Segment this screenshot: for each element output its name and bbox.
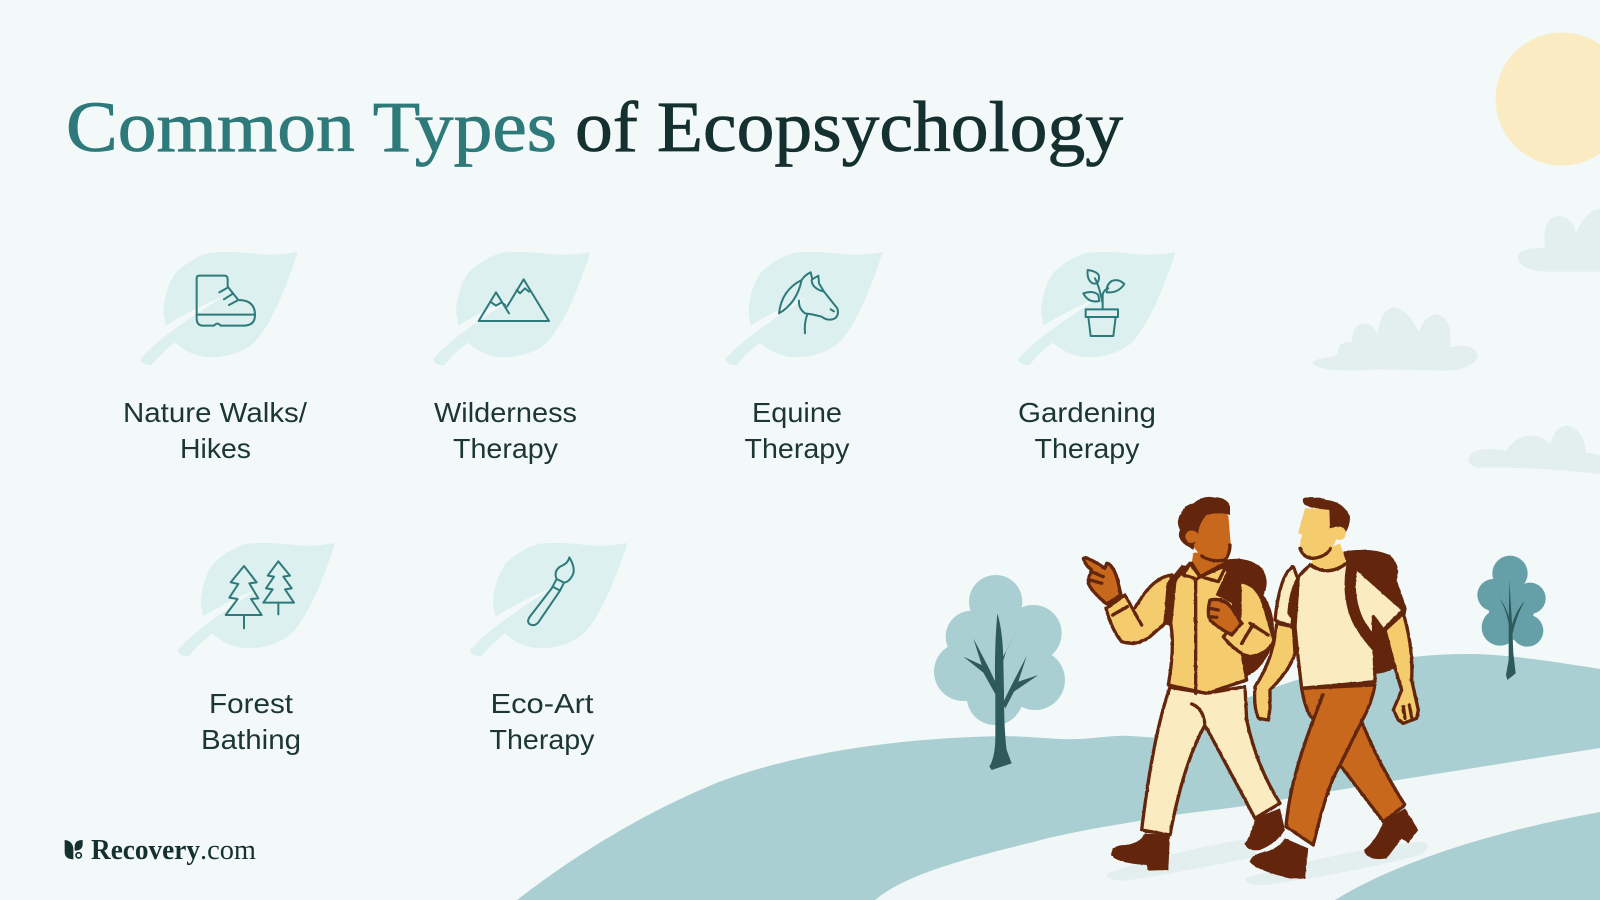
icon: potted plant in leaf	[1018, 252, 1175, 365]
label: Hikes	[180, 433, 251, 464]
label: Wilderness	[434, 397, 577, 428]
card: eco-art therapy	[470, 543, 627, 755]
label: Therapy	[744, 433, 850, 464]
far strap	[1163, 565, 1190, 627]
hand on strap	[1208, 599, 1242, 635]
card: nature walks	[123, 252, 307, 464]
main hill	[517, 654, 1600, 900]
hiker right	[1249, 497, 1418, 879]
icon: logo mark	[65, 840, 83, 859]
icon: trees in leaf	[178, 543, 335, 656]
card: equine therapy	[726, 252, 883, 464]
shirt torso	[1168, 563, 1247, 693]
label	[434, 397, 577, 464]
illustration: two hikers	[1083, 497, 1428, 885]
icon: horse in leaf	[726, 252, 883, 365]
hair	[1303, 497, 1350, 533]
label: Therapy	[453, 433, 558, 464]
title: Common Types	[66, 87, 557, 167]
label: Eco-Art	[490, 688, 594, 719]
far sleeve	[1275, 567, 1298, 627]
logo wordmark	[91, 835, 256, 866]
far arm	[1255, 623, 1295, 720]
ground shadows	[1107, 838, 1428, 885]
label	[123, 397, 307, 464]
trousers	[1142, 687, 1280, 835]
face	[1298, 508, 1337, 558]
near strap	[1350, 567, 1380, 650]
clouds	[1313, 208, 1600, 474]
label: Bathing	[201, 724, 301, 755]
far strap	[1287, 565, 1308, 627]
walking path	[875, 748, 1600, 900]
trousers	[1286, 685, 1405, 845]
pointing arm	[1106, 575, 1172, 643]
pointing hand	[1083, 558, 1121, 604]
icon: mountains in leaf	[433, 252, 590, 365]
card: forest bathing	[178, 543, 335, 755]
boots	[1364, 808, 1418, 859]
landscape hills and path	[517, 654, 1600, 900]
label	[490, 688, 595, 755]
label: Forest	[209, 688, 293, 719]
title	[66, 87, 1123, 167]
boots	[1245, 808, 1285, 850]
backpack	[1343, 550, 1407, 674]
icon: paintbrush in leaf	[470, 543, 627, 656]
logo	[65, 835, 256, 866]
t-shirt	[1295, 563, 1403, 688]
near arm	[1223, 582, 1274, 657]
title: of Ecopsychology	[575, 87, 1123, 167]
hiker left	[1083, 497, 1285, 871]
label: Therapy	[490, 724, 595, 755]
label	[744, 397, 850, 464]
logo wordmark: .com	[200, 835, 256, 866]
label: Nature Walks/	[123, 397, 307, 428]
backpack	[1223, 559, 1274, 677]
icon: boot in leaf	[141, 252, 298, 365]
face	[1190, 512, 1231, 562]
label: Gardening	[1018, 397, 1156, 428]
sun	[1496, 32, 1600, 166]
label: Therapy	[1034, 433, 1140, 464]
neck	[1192, 547, 1228, 577]
label	[1018, 397, 1156, 464]
collar and placket	[1183, 563, 1227, 582]
near arm	[1385, 613, 1418, 723]
label: Equine	[752, 397, 842, 428]
logo wordmark: Recovery	[91, 835, 200, 866]
hair	[1178, 497, 1230, 550]
card: wilderness therapy	[433, 252, 590, 464]
card: gardening therapy	[1018, 252, 1175, 464]
near strap	[1216, 563, 1261, 605]
tree: small right tree	[1477, 556, 1546, 680]
tree: large left tree	[934, 575, 1065, 770]
label	[201, 688, 301, 755]
neck	[1312, 543, 1347, 570]
